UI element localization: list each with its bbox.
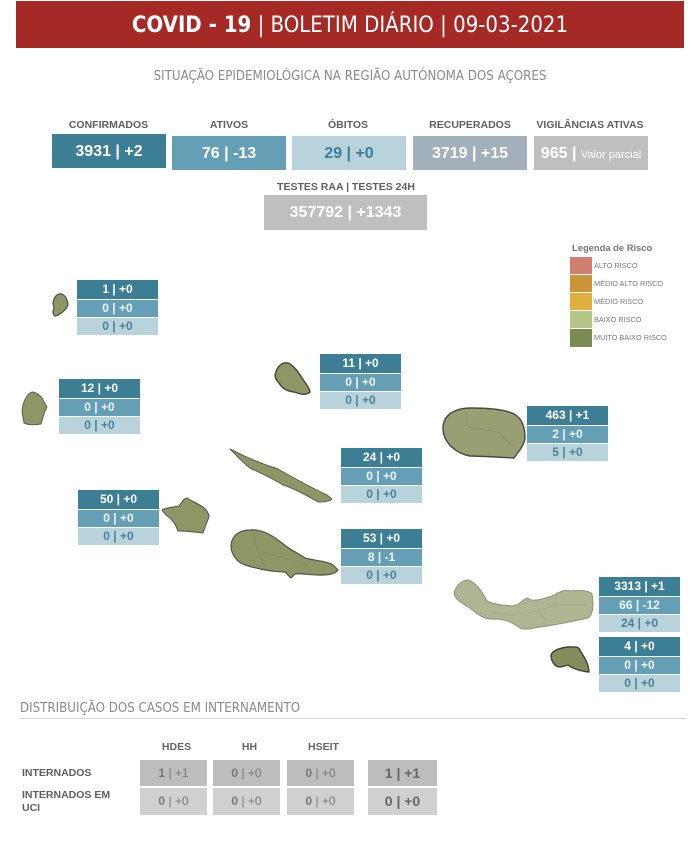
data box: Pico: 0 | +0 [366,568,397,582]
island: Terceira [443,408,525,458]
card: testes [264,195,427,230]
cell: HH UCI: 0 | +0 [231,794,262,808]
data box: São Jorge [341,448,422,503]
section heading: internamento [20,701,686,719]
data box: Graciosa: 11 | +0 [342,356,379,370]
column header: HH: HH [242,741,257,753]
cell: HSEIT internados [287,760,354,786]
cell: HH internados: 0 | +0 [231,766,262,780]
card: testes: 357792 | +1343 [290,204,401,221]
data box: São Miguel: 3313 | +1 [614,579,665,593]
data box: São Jorge: 24 | +0 [363,450,400,464]
data box: Santa Maria: 0 | +0 [624,676,655,690]
data box: Corvo: 0 | +0 [102,301,133,315]
island: Santa Maria [551,647,589,672]
data box: Faial: 0 | +0 [103,511,134,525]
island: Flores [22,392,47,425]
data box: Terceira: 463 | +1 [546,408,589,422]
cell: HDES UCI: 0 | +0 [158,794,189,808]
card: vigilâncias ativas [534,136,648,170]
data box: Pico: 8 | -1 [368,550,395,564]
cell: total UCI: 0 | +0 [385,793,420,809]
cell: total internados: 1 | +1 [385,765,420,781]
island: Corvo [53,294,68,316]
data box: Pico [341,529,422,584]
cell: total UCI [368,788,437,815]
island: São Jorge [230,449,332,502]
data box: Flores: 0 | +0 [84,400,115,414]
legend text: médio alto risco: MÉDIO ALTO RISCO [594,279,663,288]
label: vigilâncias ativas: VIGILÂNCIAS ATIVAS [536,119,644,131]
card: óbitos [292,136,406,170]
row label: internados em UCI [22,789,110,814]
card: óbitos: 29 | +0 [324,145,374,162]
legend text: muito baixo risco: MUITO BAIXO RISCO [594,333,667,342]
legend text: médio risco: MÉDIO RISCO [594,297,643,306]
swatch: alto risco [570,257,592,274]
data box: Graciosa: 0 | +0 [345,393,376,407]
swatch: muito baixo risco [570,329,592,347]
label: confirmados: CONFIRMADOS [69,119,148,131]
card: recuperados [413,136,527,170]
data box: Santa Maria: 4 | +0 [624,639,655,653]
row label: internados: INTERNADOS [22,767,91,779]
data box: Terceira [527,406,608,461]
data box: Faial [78,490,159,545]
swatch: médio risco [570,293,592,310]
data box: Corvo: 1 | +0 [102,282,133,296]
row label: internados em UCI: INTERNADOS EM [22,789,110,801]
data box: Santa Maria [599,637,680,692]
row label: internados em UCI: UCI [22,802,40,814]
cell: total internados [368,760,437,786]
cell: HSEIT UCI: 0 | +0 [305,794,336,808]
data box: Flores: 12 | +0 [81,381,118,395]
legend text: alto risco: ALTO RISCO [594,261,638,270]
title banner: COVID - 19 | BOLETIM DIÁRIO | 09-03-2021 [132,13,568,38]
card: recuperados: 3719 | +15 [432,145,508,162]
island: Pico [231,530,338,578]
data box: São Miguel: 66 | -12 [619,598,660,612]
cell: HDES internados [140,760,207,786]
table: hospital cases [22,741,437,815]
data box: Corvo: 0 | +0 [102,319,133,333]
data box: Graciosa: 0 | +0 [345,375,376,389]
cell: HDES internados: 1 | +1 [158,766,189,780]
card: confirmados [52,134,166,168]
island: Graciosa [275,363,310,394]
cell: HH internados [213,760,280,786]
data box: Pico: 53 | +0 [363,531,400,545]
data box: Flores: 0 | +0 [84,418,115,432]
section heading: internamento: DISTRIBUIÇÃO DOS CASOS EM INTERNAMENTO [20,701,300,716]
data box: Flores [59,379,140,434]
island: São Miguel [454,580,593,629]
legend: risk levels [570,242,667,347]
subtitle: SITUAÇÃO EPIDEMIOLÓGICA NA REGIÃO AUTÓNOMA DOS AÇORES [154,69,546,84]
data box: Graciosa [320,354,401,409]
cell: HSEIT UCI [287,788,354,815]
card: ativos: 76 | -13 [202,145,256,162]
label: óbitos: ÓBITOS [328,119,368,131]
label: ativos: ATIVOS [210,119,248,131]
data box: Faial: 50 | +0 [100,492,137,506]
legend text: baixo risco: BAIXO RISCO [594,315,641,324]
island: Faial [162,498,209,533]
data box: São Miguel: 24 | +0 [621,616,658,630]
data box: Faial: 0 | +0 [103,529,134,543]
label: recuperados: RECUPERADOS [429,119,511,131]
data box: Corvo [77,280,158,335]
legend title: Legenda de Risco [572,242,652,253]
data box: Santa Maria: 0 | +0 [624,658,655,672]
label: testes: TESTES RAA | TESTES 24H [277,181,415,193]
swatch: médio alto risco [570,275,592,292]
cell: HSEIT internados: 0 | +0 [305,766,336,780]
data box: São Jorge: 0 | +0 [366,469,397,483]
data box: Terceira: 5 | +0 [552,445,583,459]
card: ativos [172,136,286,170]
cell: HH UCI [213,788,280,815]
data box: São Jorge: 0 | +0 [366,487,397,501]
card: confirmados: 3931 | +2 [75,143,143,160]
column header: HSEIT: HSEIT [308,741,339,753]
cell: HDES UCI [140,788,207,815]
swatch: baixo risco [570,311,592,328]
card: vigilâncias ativas: 965 | Valor parcial [541,145,641,162]
title banner [16,1,684,48]
column header: HDES: HDES [162,741,191,753]
data box: Terceira: 2 | +0 [552,427,583,441]
data box: São Miguel [599,577,680,632]
